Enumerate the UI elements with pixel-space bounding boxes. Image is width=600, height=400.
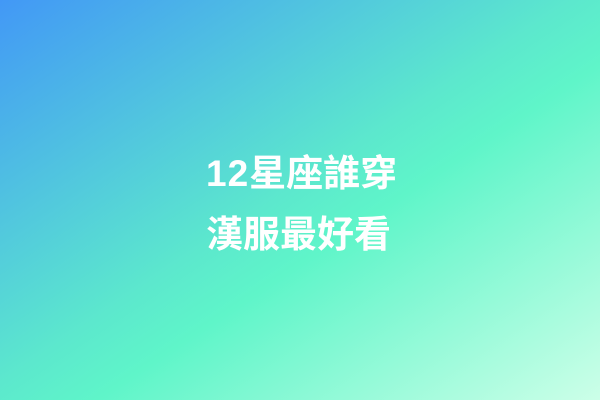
title line 2: 漢服最好看 <box>206 214 391 255</box>
title <box>206 153 397 255</box>
title line 1: 12星座誰穿 <box>206 153 397 194</box>
